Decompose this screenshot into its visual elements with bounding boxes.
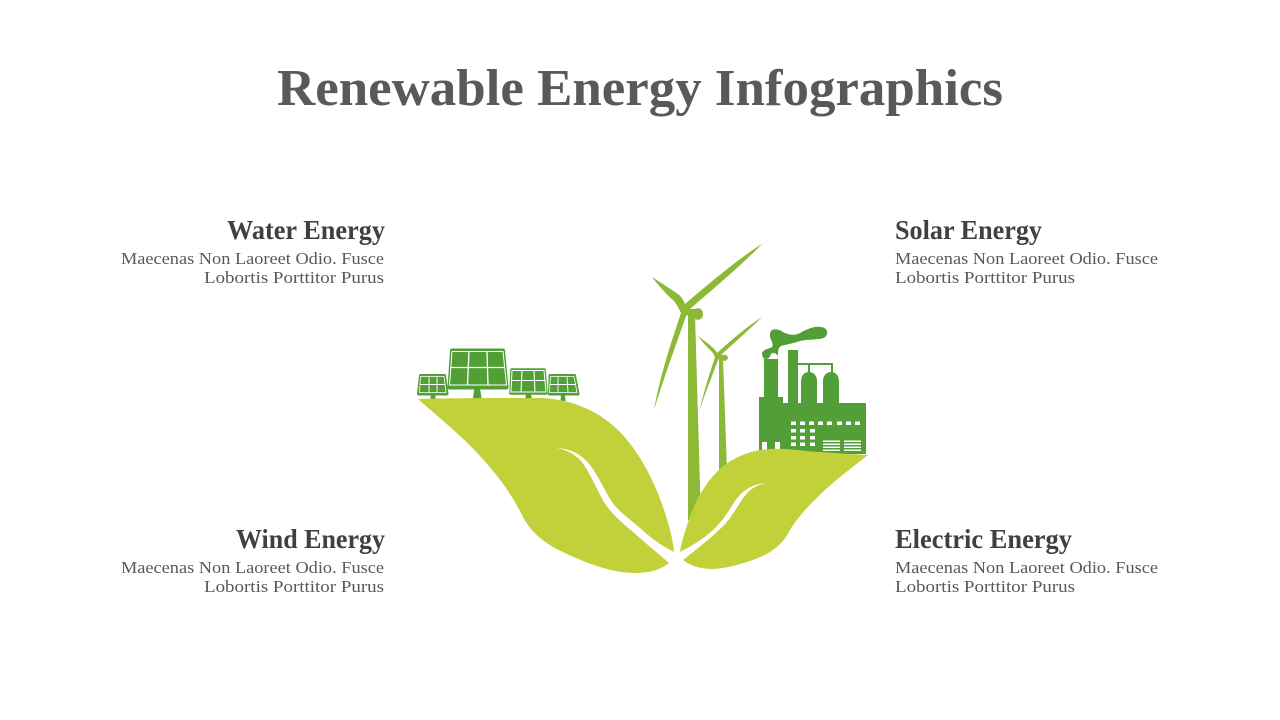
text block: wind energy: Maecenas Non Laoreet Odio. Fusce (121, 558, 384, 577)
text block: electric energy: Electric Energy (895, 524, 1072, 554)
text block: solar energy: Solar Energy (895, 215, 1042, 245)
factory smoke (762, 327, 827, 359)
text block: electric energy (895, 524, 1158, 596)
factory windows (762, 422, 861, 451)
factory pipes (798, 364, 832, 375)
text block: solar energy (895, 215, 1158, 287)
icon: solar panels (418, 350, 578, 401)
text block: electric energy: Lobortis Porttitor Purus (895, 577, 1075, 596)
text block: water energy (121, 215, 385, 287)
right leaf (680, 449, 868, 569)
factory building (759, 350, 866, 454)
text block: water energy: Maecenas Non Laoreet Odio. Fusce (121, 249, 384, 268)
text block: water energy: Water Energy (227, 215, 385, 245)
solar panel 3 (510, 370, 546, 401)
icon: small wind turbine (698, 317, 762, 470)
icon: large wind turbine (652, 244, 762, 520)
solar panel 4 (550, 376, 578, 401)
solar panel 2 (450, 350, 506, 401)
solar panel 1 (418, 376, 447, 401)
text block: wind energy: Wind Energy (236, 524, 385, 554)
icon: factory (759, 327, 866, 454)
text block: wind energy: Lobortis Porttitor Purus (204, 577, 384, 596)
title: Renewable Energy Infographics (277, 60, 1003, 117)
text block: solar energy: Lobortis Porttitor Purus (895, 268, 1075, 287)
text block: solar energy: Maecenas Non Laoreet Odio. Fusce (895, 249, 1158, 268)
text block: water energy: Lobortis Porttitor Purus (204, 268, 384, 287)
text block: electric energy: Maecenas Non Laoreet Odio. Fusce (895, 558, 1158, 577)
left leaf (418, 398, 674, 573)
text block: wind energy (121, 524, 385, 596)
